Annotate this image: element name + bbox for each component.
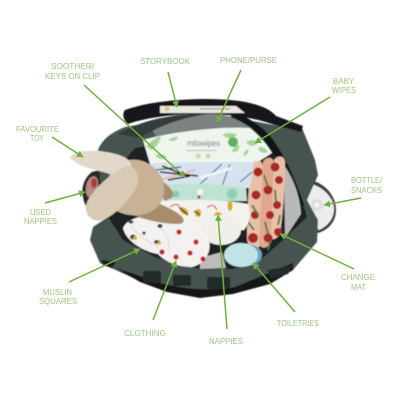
label: baby wipes: WIPES (332, 86, 356, 95)
top strap (123, 99, 303, 132)
label: used nappies (24, 208, 57, 226)
arrow: phone (217, 70, 241, 122)
soother clip (160, 166, 198, 180)
storybook (160, 106, 245, 113)
label: nappies: NAPPIES (209, 337, 243, 346)
bee nappies (149, 200, 250, 236)
arrow: bottle snacks (324, 198, 361, 205)
arrow: muslin squares (69, 249, 140, 282)
bag body (90, 113, 318, 297)
label: muslin squares: MUSLIN (43, 288, 72, 297)
label: storybook: STORYBOOK (140, 57, 191, 66)
arrow: soother (84, 85, 185, 177)
label: phone/purse: PHONE/PURSE (220, 56, 277, 65)
bottle pocket (304, 180, 336, 233)
arrow: nappies (218, 215, 227, 329)
rabbit ear top (70, 151, 131, 177)
muslin roll (123, 216, 210, 267)
rabbit toy (70, 151, 184, 224)
baby wipes: milowipes (187, 139, 220, 148)
label: soother / keys on clip: KEYS ON CLIP (45, 72, 100, 81)
phone pocket (148, 114, 254, 142)
label: soother / keys on clip: SOOTHER/ (51, 62, 95, 71)
bag bottom rim (101, 260, 293, 298)
used nappies pocket (82, 168, 112, 210)
label: bottle / snacks: BOTTLE/ (351, 176, 383, 185)
label: used nappies: USED (30, 208, 51, 217)
label: favourite toy (16, 125, 59, 143)
green printed fabric (152, 184, 247, 202)
label: change mat: MAT (351, 283, 366, 292)
label: change mat (341, 273, 375, 292)
bag interior (108, 130, 307, 269)
arrow: storybook (168, 72, 177, 107)
arrow: toiletries (253, 263, 295, 312)
white egg (201, 215, 241, 245)
label: clothing: CLOTHING (124, 329, 166, 338)
dragonfly fabric (145, 162, 254, 188)
label: muslin squares (39, 288, 77, 306)
label: change mat: CHANGE (341, 273, 375, 282)
label: favourite toy: FAVOURITE (16, 125, 59, 134)
arrow: used nappies (45, 192, 85, 203)
label: toiletries: TOILETRIES (277, 319, 319, 328)
label: bottle / snacks (351, 176, 383, 195)
rabbit ear lower (86, 166, 138, 221)
baby wipes (143, 128, 272, 164)
arrow: baby wipes (255, 97, 330, 143)
arrow: clothing (153, 261, 176, 320)
label: used nappies: NAPPIES (24, 217, 57, 226)
arrow: change mat (280, 234, 354, 269)
lining strip (200, 252, 226, 269)
label: baby wipes: BABY (333, 77, 355, 86)
right dark inner edge (230, 113, 304, 207)
label: soother / keys on clip (45, 62, 100, 81)
toiletries (224, 243, 262, 267)
label: muslin squares: SQUARES (39, 297, 77, 306)
ladybird change mat (247, 157, 285, 250)
label: bottle / snacks: SNACKS (351, 186, 382, 195)
arrow: favourite toy (52, 137, 83, 157)
illustration: open changing bag with contents (70, 99, 336, 298)
label: baby wipes (332, 77, 356, 95)
grey lining (284, 165, 301, 238)
label: favourite toy: TOY (30, 134, 45, 143)
